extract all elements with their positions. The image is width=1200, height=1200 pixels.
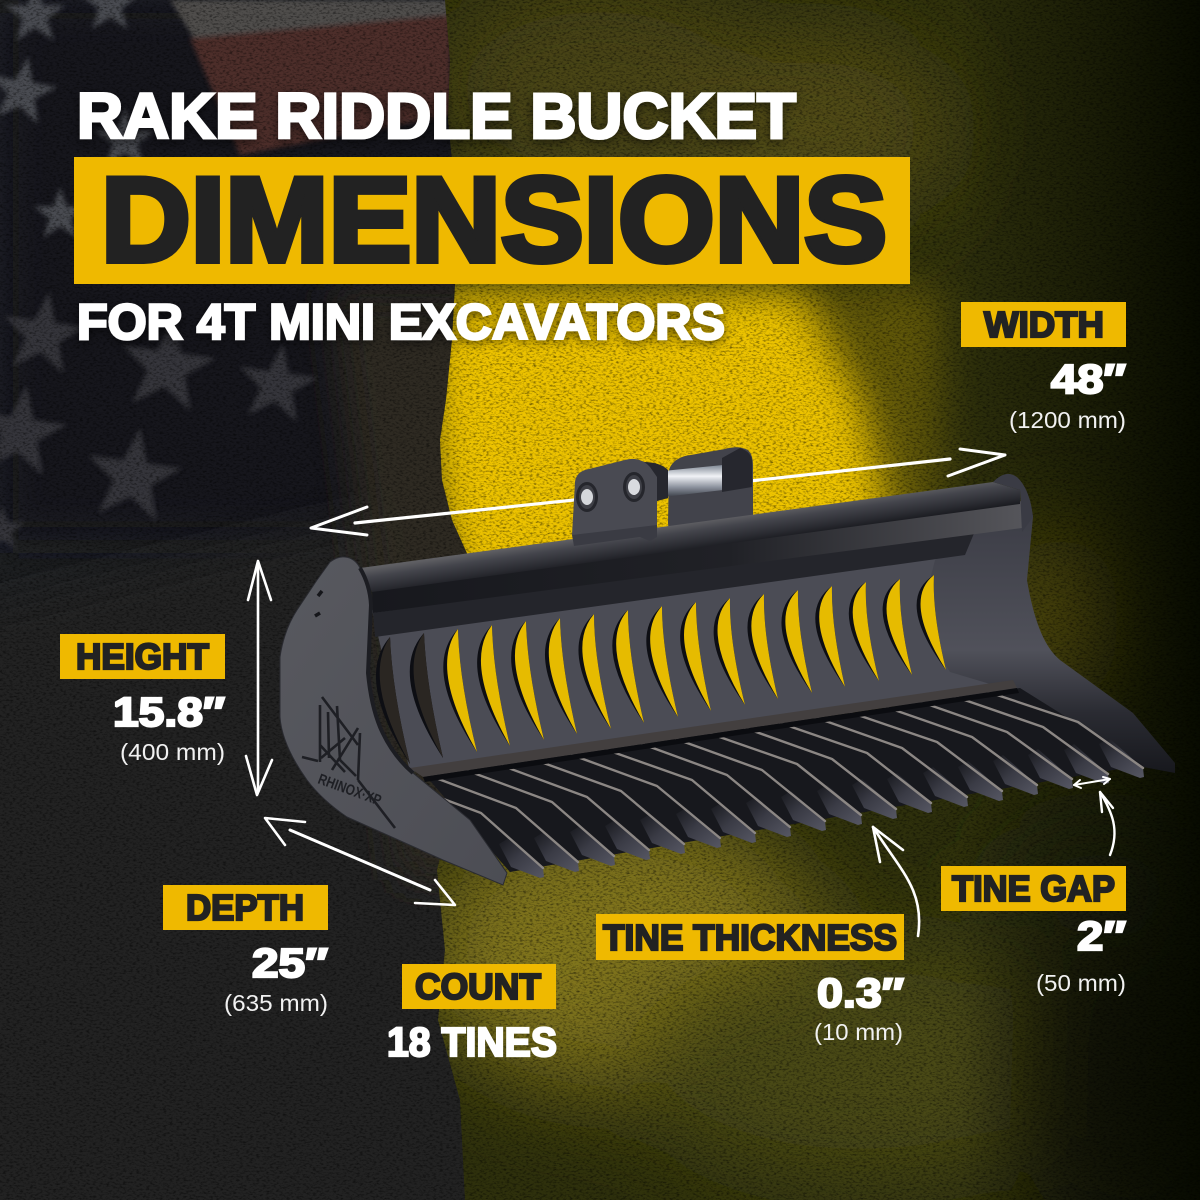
value: width	[1009, 356, 1126, 433]
value: tine gap	[1036, 913, 1126, 996]
value: depth: (635 mm)	[224, 990, 328, 1016]
right end disc	[993, 474, 1033, 532]
label: tine gap: TINE GAP	[952, 868, 1115, 909]
arrow: tine thickness	[873, 827, 919, 936]
hitch: front plate with bolts	[572, 459, 657, 550]
title: rake riddle bucket: RAKE RIDDLE BUCKET	[77, 80, 796, 152]
subtitle: FOR 4T MINI EXCAVATORS	[77, 294, 725, 350]
arrow: tine gap measure	[1074, 777, 1110, 788]
upper bracket band	[373, 531, 975, 637]
value: tine gap: 2″	[1077, 913, 1126, 959]
left plate inner rim	[360, 568, 413, 773]
banner: dimensions: DIMENSIONS	[101, 153, 887, 287]
arrow: tine gap pointer	[1100, 792, 1115, 855]
slots showing dark background	[380, 633, 443, 764]
arrow: width (behind bucket)	[311, 449, 1005, 535]
value: depth	[224, 940, 328, 1016]
value: tine thickness	[814, 970, 904, 1045]
value: width: (1200 mm)	[1009, 407, 1126, 433]
label: count: COUNT	[415, 966, 541, 1007]
icon: rhinox logo	[302, 697, 395, 828]
hitch front lug over tube	[572, 525, 657, 546]
value: depth: 25″	[252, 940, 328, 986]
label: width: WIDTH	[984, 304, 1104, 345]
slots showing yellow background	[447, 575, 946, 752]
logo wordmark: RHINOX·XP	[316, 771, 383, 809]
black gap below band	[423, 688, 1019, 782]
label: width	[961, 302, 1126, 347]
tine blade tips	[499, 738, 1144, 878]
label: tine thickness: TINE THICKNESS	[603, 917, 897, 958]
tine top edges	[398, 692, 1143, 868]
value: count: 18 TINES	[387, 1019, 557, 1065]
slot rims	[376, 575, 946, 764]
back wall with ribs	[372, 525, 1015, 772]
lower tube face	[372, 501, 1022, 613]
lower rust band	[410, 680, 1017, 777]
right side plate	[925, 500, 1175, 773]
value: width: 48″	[1051, 356, 1126, 402]
label: depth: DEPTH	[186, 887, 304, 928]
value: tine gap: (50 mm)	[1036, 970, 1126, 996]
top tube	[360, 482, 1020, 592]
side plate notches	[315, 591, 322, 616]
tine floor	[425, 688, 1143, 872]
label: depth	[163, 885, 328, 930]
hitch: rear plate	[668, 447, 753, 545]
value: height	[113, 689, 225, 765]
arrow: depth	[265, 818, 455, 905]
hitch: pin collars	[643, 448, 752, 503]
value: height: 15.8″	[113, 689, 225, 735]
left side plate	[280, 557, 507, 885]
rake riddle bucket product drawing	[280, 447, 1175, 885]
value: tine thickness: 0.3″	[817, 970, 904, 1016]
hitch: chrome pin	[663, 465, 723, 497]
arrow: height	[246, 561, 272, 795]
value: tine thickness: (10 mm)	[814, 1019, 903, 1045]
label: height: HEIGHT	[76, 636, 209, 677]
value: height: (400 mm)	[120, 739, 225, 765]
